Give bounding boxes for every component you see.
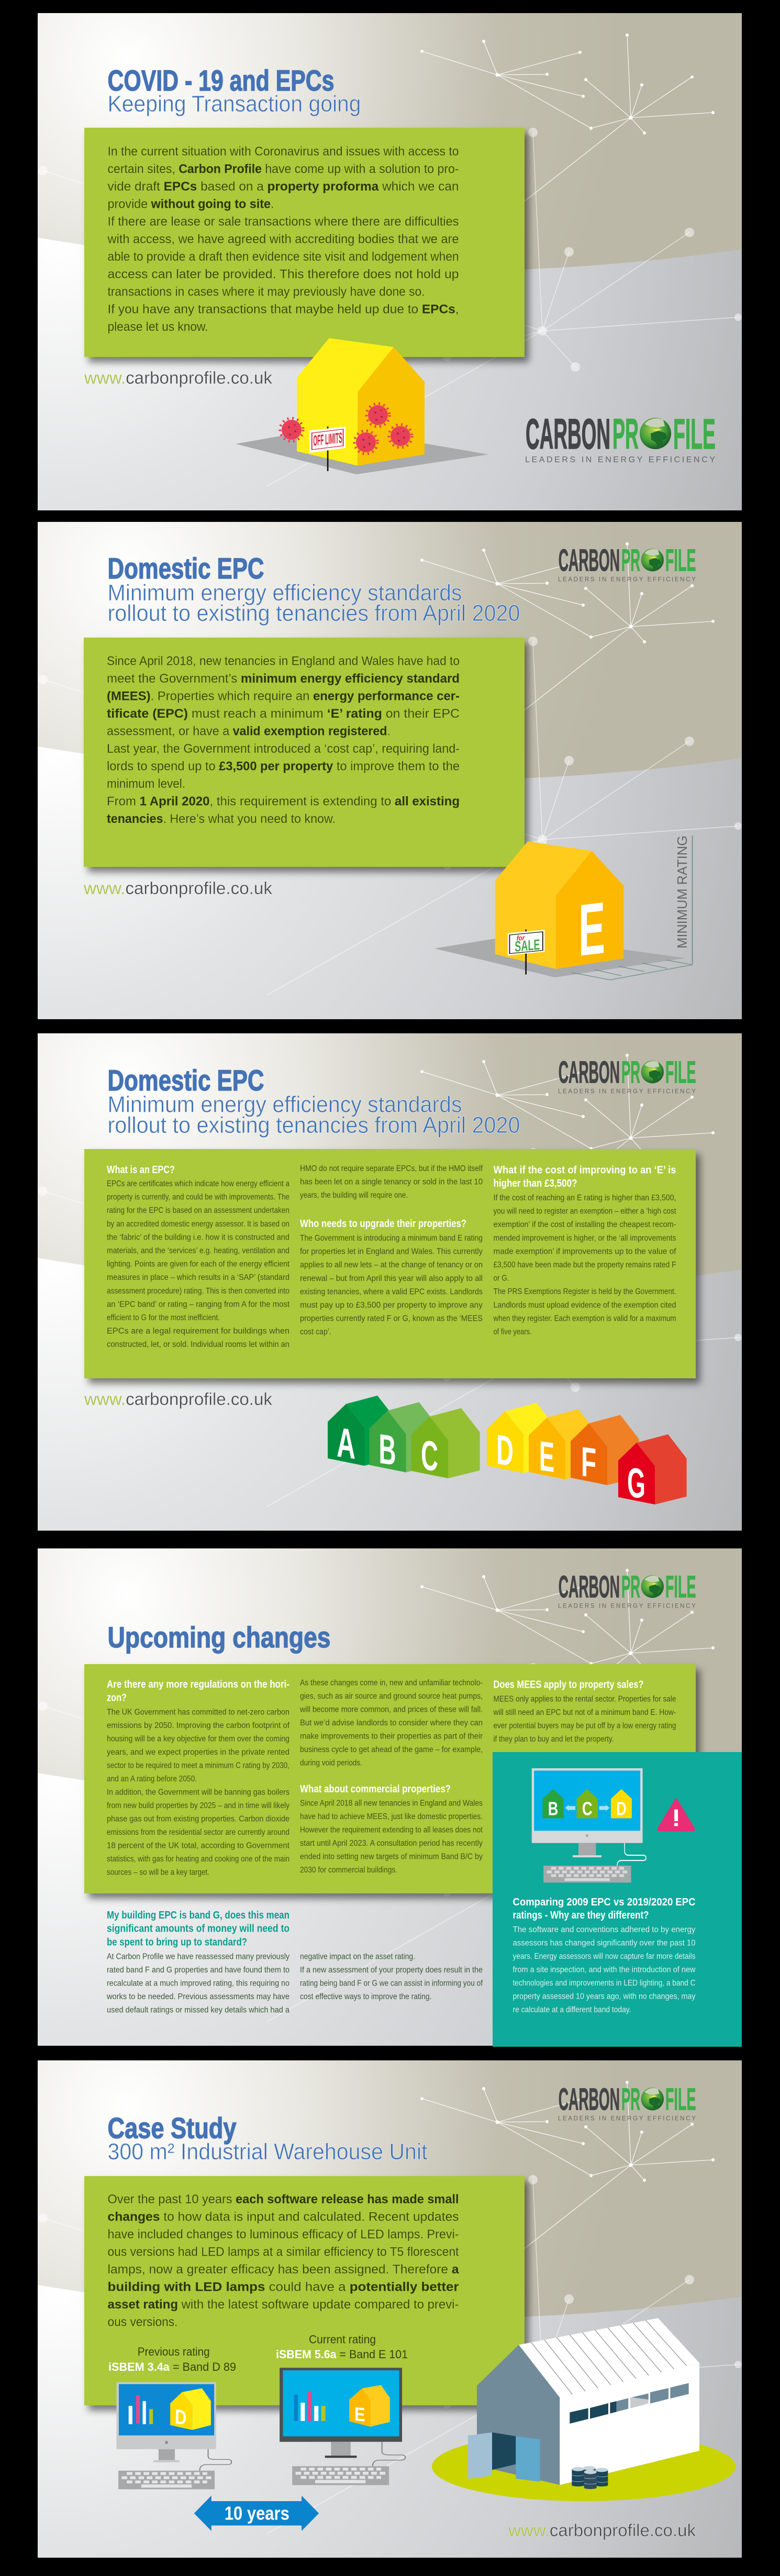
logo: Carbon Profile: CARBON bbox=[559, 1569, 620, 1604]
icon: monitor with B C D houses: C bbox=[582, 1798, 592, 1820]
body text: If there are lease or sale transactions where there are difficulties bbox=[108, 215, 459, 229]
column 2: continuation and who needs to upgrade: HMO do not require separate EPCs, but if the HMO itself bbox=[300, 1164, 483, 1173]
body text bbox=[107, 654, 460, 826]
icon: warehouse building bbox=[432, 2318, 736, 2501]
logo: Carbon Profile: PR bbox=[621, 1055, 640, 1090]
green text box shadow bbox=[88, 2181, 529, 2411]
panel background with network pattern bbox=[38, 13, 742, 510]
column 3: cost of improving: when they register. Each exemption is valid for a maximum bbox=[493, 1314, 676, 1323]
subheading: Minimum energy efficiency standards bbox=[108, 580, 462, 606]
teal panel body text: from a site inspection, and with the introduction of new bbox=[513, 1965, 696, 1975]
icon: current monitor with band E house: E bbox=[354, 2403, 365, 2426]
column 3: cost of improving: £3,500 have been made but the property remains rated F bbox=[493, 1261, 676, 1269]
column 2: technologies and commercial properties: As these changes come in, new and unfamiliar technolo- bbox=[300, 1678, 483, 1688]
column 1: more regulations: sources – so will be a key target. bbox=[107, 1868, 209, 1877]
section: band G building: If a new assessment of your property does result in the bbox=[300, 1966, 483, 1975]
subheading: Keeping Transaction going bbox=[108, 91, 361, 117]
section: band G building: significant amounts of money will need to bbox=[107, 1923, 289, 1935]
column 3: cost of improving: mended improvement is higher, or the ‘all improvements bbox=[493, 1234, 676, 1243]
icon: E rated house with for sale sign and axis: E bbox=[578, 886, 605, 972]
section: band G building: rated band F and G properties and have found them to bbox=[107, 1966, 289, 1975]
green text box shadow bbox=[88, 1154, 700, 1384]
icon: monitor with B C D houses: D bbox=[616, 1798, 627, 1820]
icon: previous monitor with band D house: D bbox=[175, 2405, 186, 2429]
green text box bbox=[84, 1149, 696, 1378]
column 2: technologies and commercial properties: business cycle to get ahead of the game – for example, bbox=[300, 1745, 483, 1754]
body text: (MEES). Properties which require an energy performance cer- bbox=[107, 689, 460, 704]
body text bbox=[107, 144, 459, 334]
column 1: What is an EPC?: efficient to G for the most inefficient. bbox=[107, 1313, 220, 1322]
body text: asset rating with the latest software update compared to previ- bbox=[108, 2298, 459, 2312]
section: band G building: recalculate at a much improved rating, this requiring no bbox=[107, 1979, 289, 1988]
section: band G building: works to be needed. Previous assessments may have bbox=[106, 1992, 289, 2001]
column 2: continuation and who needs to upgrade: must pay up to £3,500 per property to improve any bbox=[300, 1301, 483, 1310]
column 1: more regulations: In addition, the Government will be banning gas boilers bbox=[107, 1788, 289, 1797]
column 1: What is an EPC?: rating for the EPC is based on an assessment undertaken bbox=[107, 1206, 289, 1215]
column 2: technologies and commercial properties: start until April 2023. A consultation period has recently bbox=[300, 1839, 483, 1848]
teal panel body text: The software and conventions adhered to by energy bbox=[513, 1925, 696, 1934]
column 2: technologies and commercial properties: 2030 for commercial buildings. bbox=[300, 1866, 397, 1875]
previous rating label bbox=[108, 2345, 236, 2373]
column 1: What is an EPC?: by an accredited domestic energy assessor. It is based on bbox=[107, 1220, 289, 1229]
column 3: property sales: MEES only applies to the rental sector. Properties for sale bbox=[493, 1695, 676, 1704]
teal panel body text: technologies and improvements in LED lighting, a band C bbox=[513, 1979, 695, 1988]
section: band G building: cost effective ways to improve the rating. bbox=[300, 1992, 431, 2001]
heading: Upcoming changes: Upcoming changes bbox=[108, 1621, 331, 1654]
column 1: more regulations: sector to be required to meet a minimum C rating by 2030, bbox=[107, 1761, 289, 1770]
green text box bbox=[84, 2176, 525, 2405]
column 1: What is an EPC?: the ‘fabric’ of the building i.e. how it is constructed and bbox=[107, 1233, 289, 1242]
logo: Carbon Profile: CARBON bbox=[526, 410, 610, 458]
body text: access can later be provided. This therefore does not hold up bbox=[108, 267, 459, 282]
column 3: cost of improving: higher than £3,500? bbox=[493, 1178, 577, 1189]
column 2: continuation and who needs to upgrade: renewal – but from April this year will also apply to all bbox=[300, 1274, 483, 1283]
teal panel heading: Comparing 2009 EPC vs 2019/2020 EPC bbox=[513, 1897, 695, 1908]
logo: Carbon Profile: PR bbox=[612, 410, 639, 458]
column 1: What is an EPC?: materials, and the ‘services’ e.g. heating, ventilation and bbox=[107, 1246, 289, 1255]
section: band G building: used default ratings or missed key details which had a bbox=[107, 2006, 289, 2015]
arrow: 10 years: 10 years bbox=[225, 2502, 289, 2524]
body text: certain sites, Carbon Profile have come up with a solution to pro- bbox=[108, 162, 459, 176]
logo: Carbon Profile: LEADERS IN ENERGY EFFICIENCY bbox=[558, 1603, 696, 1609]
body text: vide draft EPCs based on a property proforma which we can bbox=[108, 180, 459, 194]
panel background with network pattern bbox=[38, 1548, 742, 2046]
body text: able to provide a draft then evidence site visit and lodgement when bbox=[108, 250, 459, 264]
column 3: cost of improving: Landlords must upload evidence of the exemption cited bbox=[493, 1301, 676, 1310]
column 3: cost of improving: exemption’ if the cost of installing the cheapest recom- bbox=[493, 1220, 676, 1229]
column 2: technologies and commercial properties: ended into setting new targets of minimum Band B/C by bbox=[300, 1852, 483, 1861]
column 1: more regulations: years, and we expect properties in the private rented bbox=[107, 1748, 289, 1757]
logo: Carbon Profile: CARBON bbox=[559, 1055, 620, 1090]
body text: If you have any transactions that maybe held up due to EPCs, bbox=[108, 303, 459, 316]
body text: Since April 2018, new tenancies in England and Wales have had to bbox=[107, 654, 460, 668]
column 2: technologies and commercial properties: However the requirement extending to all leases does not bbox=[300, 1826, 483, 1834]
green text box bbox=[84, 1664, 696, 1893]
body text: tificate (EPC) must reach a minimum ‘E’ rating on their EPC bbox=[107, 707, 460, 721]
icon: A to G rating houses: A bbox=[337, 1419, 355, 1468]
column 1: What is an EPC?: property is currently, and could be with improvements. The bbox=[107, 1193, 289, 1202]
body text: changes to how data is input and calculated. Recent updates bbox=[108, 2210, 459, 2224]
column 3: cost of improving: or G. bbox=[493, 1274, 509, 1283]
heading: Domestic EPC: Domestic EPC bbox=[108, 1064, 264, 1097]
section: band G building: negative impact on the asset rating. bbox=[300, 1953, 415, 1961]
icon: E rated house with for sale sign and axis: SALE bbox=[515, 936, 540, 955]
teal panel body text: years. Energy assessors will now capture far more details bbox=[513, 1952, 696, 1961]
current rating label: Current rating bbox=[309, 2333, 376, 2346]
panel: Case study: FILE bbox=[665, 2082, 696, 2117]
panel: Case study bbox=[38, 2060, 742, 2558]
body text: Last year, the Government introduced a ‘cost cap’, requiring land- bbox=[107, 742, 460, 756]
icon: A to G rating houses: E bbox=[539, 1432, 554, 1481]
green text box shadow bbox=[88, 643, 528, 872]
column 2: continuation and who needs to upgrade: has been let on a single tenancy or sold in the last 10 bbox=[300, 1178, 483, 1187]
panel background with network pattern bbox=[38, 1033, 742, 1531]
column 2: technologies and commercial properties bbox=[299, 1678, 483, 1875]
column 2: continuation and who needs to upgrade: Who needs to upgrade their properties? bbox=[300, 1218, 466, 1230]
panel background with network pattern bbox=[38, 2060, 742, 2558]
section: band G building: rating being band F or G we can assist in informing you of bbox=[300, 1979, 483, 1988]
website url: www.carbonprofile.co.uk bbox=[84, 368, 272, 387]
heading: Domestic EPC: Domestic EPC bbox=[108, 552, 264, 585]
body text: Over the past 10 years each software release has made small bbox=[108, 2192, 459, 2206]
column 3: property sales: Does MEES apply to property sales? bbox=[493, 1679, 644, 1691]
logo: Carbon Profile: PR bbox=[621, 2082, 640, 2117]
column 1: What is an EPC?: constructed, let, or sold. Individual rooms let within an bbox=[107, 1340, 289, 1349]
column 2: continuation and who needs to upgrade bbox=[300, 1164, 483, 1336]
column 2: continuation and who needs to upgrade: for properties let in England and Wales. This currently bbox=[300, 1247, 483, 1256]
teal panel body text: re calculate at a different band today. bbox=[513, 2005, 631, 2014]
website url: www.carbonprofile.co.uk bbox=[508, 2521, 696, 2540]
icon: A to G rating houses: B bbox=[379, 1425, 396, 1475]
body text: provide without going to site. bbox=[108, 197, 274, 211]
section: band G building: At Carbon Profile we have reassessed many previously bbox=[107, 1953, 289, 1961]
column 2: continuation and who needs to upgrade: The Government is introducing a minimum band E rating bbox=[300, 1234, 483, 1243]
column 1: more regulations: phase gas out from existing properties. Carbon dioxide bbox=[107, 1814, 289, 1824]
section: band G building bbox=[106, 1910, 483, 2015]
column 3: property sales: if they plan to buy and let the property. bbox=[493, 1735, 614, 1744]
subheading: rollout to existing tenancies from April 2020 bbox=[108, 1112, 520, 1138]
column 3: cost of improving: The PRS Exemptions Register is held by the Government. bbox=[493, 1287, 676, 1296]
logo: Carbon Profile: LEADERS IN ENERGY EFFICIENCY bbox=[558, 576, 696, 583]
column 1: What is an EPC?: lighting. Points are given for each of the energy efficient bbox=[107, 1260, 290, 1269]
logo: Carbon Profile: LEADERS IN ENERGY EFFICIENCY bbox=[558, 2115, 696, 2122]
body text: transactions in cases where it may previously have done so. bbox=[108, 285, 425, 299]
body text: meet the Government’s minimum energy efficiency standard bbox=[107, 672, 460, 686]
icon: yellow house with viruses and off limits sign bbox=[236, 338, 488, 474]
panel background with network pattern bbox=[38, 522, 742, 1019]
column 2: technologies and commercial properties: have had to achieve MEES, just like domestic properties. bbox=[300, 1812, 483, 1821]
column 2: continuation and who needs to upgrade: existing tenancies, where a valid EPC exists. Landlords bbox=[300, 1287, 483, 1296]
body text: have included changes to luminous efficacy of LED lamps. Previ- bbox=[108, 2227, 459, 2242]
body text: From 1 April 2020, this requirement is extending to all existing bbox=[107, 795, 460, 808]
teal panel body text: property assessed 10 years ago, with no changes, may bbox=[513, 1992, 696, 2001]
body text: ous versions had LED lamps at a similar efficiency to T5 florescent bbox=[108, 2245, 459, 2259]
section: band G building: My building EPC is band G, does this mean bbox=[107, 1910, 289, 1921]
teal panel heading bbox=[513, 1897, 695, 1921]
column 1: What is an EPC?: assessment procedure) rating. This is then converted into bbox=[107, 1287, 289, 1296]
column 1: What is an EPC?: measures in place – which results in a ‘SAP’ (standard bbox=[107, 1273, 289, 1282]
column 2: continuation and who needs to upgrade: cost cap’. bbox=[300, 1328, 331, 1336]
panel: Domestic EPC minimum standards: FILE bbox=[665, 543, 696, 578]
body text: ous versions. bbox=[108, 2315, 178, 2329]
column 3: cost of improving: you will need to register an exemption – either a ‘high cost bbox=[493, 1207, 676, 1216]
website url: www.carbonprofile.co.uk bbox=[83, 878, 272, 898]
column 2: technologies and commercial properties: make improvements to their properties as part of their bbox=[300, 1732, 483, 1741]
icon: A to G rating houses: C bbox=[421, 1431, 438, 1481]
green text box shadow bbox=[88, 1669, 700, 1899]
column 1: more regulations: emissions by 2050. Improving the carbon footprint of bbox=[107, 1721, 290, 1730]
column 3: property sales: ever potential buyers may be put off by a low energy rating bbox=[493, 1722, 676, 1731]
column 3: cost of improving: What if the cost of improving to an ‘E’ is bbox=[493, 1164, 676, 1176]
subheading: Minimum energy efficiency standards bbox=[108, 1092, 462, 1117]
column 1: What is an EPC?: EPCs are certificates which indicate how energy efficient a bbox=[107, 1179, 289, 1188]
logo: Carbon Profile: PR bbox=[621, 543, 640, 578]
column 3: property sales: will still need an EPC but not of a minimum band E. How- bbox=[493, 1708, 676, 1717]
body text: lords to spend up to £3,500 per property to improve them to the bbox=[107, 759, 460, 774]
panel: Upcoming changes bbox=[38, 1548, 742, 2047]
logo: Carbon Profile: CARBON bbox=[559, 543, 620, 578]
column 3: cost of improving: of five years. bbox=[493, 1328, 532, 1336]
column 2: technologies and commercial properties: will become more common, and prices of these will fall. bbox=[299, 1705, 483, 1714]
heading: Case Study: Case Study bbox=[108, 2112, 237, 2145]
logo: Carbon Profile: LEADERS IN ENERGY EFFICIENCY bbox=[558, 1088, 696, 1095]
column 2: technologies and commercial properties: What about commercial properties? bbox=[300, 1783, 451, 1795]
column 1: more regulations: Are there any more regulations on the hori- bbox=[107, 1679, 289, 1690]
body text: building with LED lamps could have a potentially better bbox=[108, 2280, 459, 2294]
panel: Domestic EPC minimum standards bbox=[38, 522, 742, 1019]
column 3: cost of improving bbox=[493, 1164, 676, 1336]
column 1: What is an EPC? bbox=[107, 1164, 290, 1349]
icon: current monitor with band E house bbox=[280, 2368, 405, 2485]
logo: Carbon Profile: PR bbox=[621, 1569, 640, 1604]
panel: Upcoming changes: FILE bbox=[665, 1569, 696, 1604]
current rating label: iSBEM 5.6a = Band E 101 bbox=[276, 2348, 408, 2361]
panel: COVID-19 and EPCs bbox=[38, 13, 742, 510]
column 1: more regulations: emissions from the residential sector are currently around bbox=[107, 1828, 289, 1837]
body text: minimum level. bbox=[107, 777, 185, 791]
column 1: more regulations: from new build properties by 2025 – and in time will likely bbox=[107, 1801, 289, 1810]
body text: lamps, now a greater efficacy has been assigned. Therefore a bbox=[108, 2262, 459, 2277]
green text box shadow bbox=[88, 133, 529, 362]
panel: Domestic EPC details bbox=[38, 1033, 742, 1531]
body text bbox=[108, 2192, 459, 2329]
column 1: more regulations: 18 percent of the UK total, according to Government bbox=[107, 1842, 290, 1850]
teal panel: comparing EPC ratings bbox=[493, 1752, 742, 2047]
column 1: more regulations: zon? bbox=[107, 1692, 127, 1703]
icon: E rated house with for sale sign and axis bbox=[434, 835, 693, 980]
icon: A to G rating houses: F bbox=[581, 1438, 596, 1487]
column 1: more regulations bbox=[107, 1679, 290, 1877]
subheading bbox=[108, 580, 520, 626]
column 2: technologies and commercial properties: Since April 2018 all new tenancies in England and Wales bbox=[300, 1799, 483, 1808]
column 3: cost of improving: If the cost of reaching an E rating is higher than £3,500, bbox=[493, 1194, 676, 1202]
icon: E rated house with for sale sign and axis: MINIMUM RATING bbox=[674, 835, 690, 949]
subheading: 300 m² Industrial Warehouse Unit bbox=[108, 2139, 427, 2165]
teal panel heading: ratings - Why are they different? bbox=[513, 1910, 649, 1921]
current rating label bbox=[276, 2333, 408, 2361]
panel: COVID-19 and EPCs: FILE bbox=[673, 410, 716, 458]
column 2: technologies and commercial properties: gies, such as air source and ground source heat pumps, bbox=[300, 1692, 483, 1701]
body text: please let us know. bbox=[108, 320, 208, 334]
icon: monitor with B C D houses: B bbox=[548, 1798, 558, 1820]
panel: Domestic EPC details: FILE bbox=[665, 1055, 696, 1090]
subheading: rollout to existing tenancies from April 2020 bbox=[108, 600, 520, 626]
column 2: continuation and who needs to upgrade: applies to all new lets – at the change of tenancy or on bbox=[300, 1261, 483, 1269]
subheading bbox=[108, 1092, 520, 1138]
column 3: property sales bbox=[493, 1679, 676, 1744]
column 1: more regulations: and an A rating before 2050. bbox=[107, 1775, 197, 1783]
column 2: technologies and commercial properties: But we’d advise landlords to consider where they can bbox=[300, 1719, 483, 1727]
logo: Carbon Profile: LEADERS IN ENERGY EFFICIENCY bbox=[525, 455, 715, 464]
website url: www.carbonprofile.co.uk bbox=[84, 1389, 272, 1409]
column 1: more regulations: housing will be a key objective for them over the coming bbox=[107, 1735, 289, 1743]
previous rating label: iSBEM 3.4a = Band D 89 bbox=[108, 2360, 236, 2373]
green text box bbox=[84, 128, 525, 357]
icon: A to G rating houses: D bbox=[496, 1426, 514, 1476]
teal panel body text: assessors has changed significantly over the past 10 bbox=[513, 1939, 696, 1947]
icon: A to G rating houses bbox=[328, 1396, 687, 1508]
column 3: cost of improving: made exemption’ if improvements up to the value of bbox=[493, 1247, 676, 1256]
icon: A to G rating houses: G bbox=[627, 1458, 645, 1508]
logo: Carbon Profile: CARBON bbox=[559, 2082, 620, 2117]
icon: yellow house with viruses and off limits sign: OFF LIMITS bbox=[313, 430, 342, 449]
column 2: continuation and who needs to upgrade: properties currently rated F or G, known as the ‘MEES bbox=[300, 1314, 483, 1323]
column 1: What is an EPC?: EPCs are a legal requirement for buildings when bbox=[107, 1327, 289, 1336]
column 1: more regulations: The UK Government has committed to net-zero carbon bbox=[107, 1708, 289, 1717]
previous rating label: Previous rating bbox=[138, 2345, 210, 2358]
column 2: technologies and commercial properties: during void periods. bbox=[300, 1759, 362, 1767]
body text: assessment, or have a valid exemption registered. bbox=[107, 724, 391, 738]
heading: COVID-19 and EPCs: COVID - 19 and EPCs bbox=[108, 64, 334, 97]
section: band G building: be spent to bring up to standard? bbox=[107, 1937, 247, 1948]
body text: In the current situation with Coronavirus and issues with access to bbox=[108, 144, 459, 159]
icon: monitor with B C D houses bbox=[532, 1768, 646, 1882]
column 1: more regulations: statistics, with gas for heating and cooking one of the main bbox=[107, 1855, 289, 1864]
icon: E rated house with for sale sign and axis: for bbox=[517, 934, 525, 942]
icon: warning triangle bbox=[659, 1801, 694, 1829]
body text: with access, we have agreed with accrediting bodies that we are bbox=[107, 232, 459, 246]
arrow: 10 years bbox=[194, 2496, 319, 2531]
column 2: continuation and who needs to upgrade: years, the building will require one. bbox=[300, 1191, 408, 1200]
icon: previous monitor with band D house bbox=[117, 2382, 231, 2489]
column 1: What is an EPC?: What is an EPC? bbox=[107, 1164, 175, 1176]
column 1: What is an EPC?: an ‘EPC band’ or rating – ranging from A for the most bbox=[107, 1300, 290, 1309]
body text: tenancies. Here’s what you need to know. bbox=[107, 812, 336, 826]
green text box bbox=[84, 638, 525, 867]
teal panel body text bbox=[513, 1925, 696, 2014]
